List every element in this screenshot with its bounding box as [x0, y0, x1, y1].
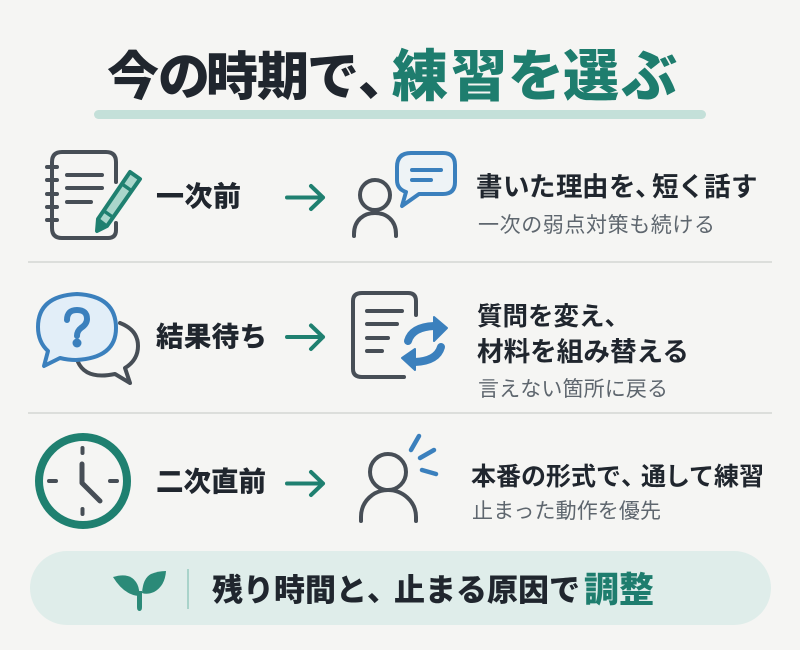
- heading: 質問を変え、材料を組み替える: 材料を組み替える: [477, 337, 689, 367]
- label: 結果待ち: 結果待ち: [156, 321, 267, 352]
- title: [107, 45, 677, 108]
- title: 練習を選ぶ: [392, 45, 677, 108]
- arrow: [287, 186, 323, 209]
- heading: 本番の形式で、通して練習: 本番の形式で、通して練習: [471, 463, 764, 491]
- row 1: 一次前: [47, 152, 758, 238]
- icon: person with emphasis lines: [361, 436, 436, 521]
- note: 言えない箇所に戻る: 言えない箇所に戻る: [478, 378, 668, 401]
- arrow: [287, 326, 323, 349]
- row 2: 結果待ち: [38, 293, 689, 401]
- heading: 質問を変え、材料を組み替える: [477, 303, 689, 367]
- note: 一次の弱点対策も続ける: 一次の弱点対策も続ける: [478, 214, 715, 237]
- title: 今の時期で、: [107, 49, 410, 107]
- arrow: [287, 472, 323, 495]
- icon: sprout: [113, 571, 166, 611]
- banner text: 残り時間と、止まる原因で: [212, 573, 580, 608]
- icon: question speech bubbles: [38, 294, 138, 383]
- title underline: [94, 110, 706, 119]
- label: 二次直前: 二次直前: [156, 466, 266, 497]
- row 3: 二次直前: [39, 436, 764, 525]
- icon: document with refresh: [353, 293, 447, 377]
- bottom banner: [30, 551, 771, 625]
- heading: 書いた理由を、短く話す: 書いた理由を、短く話す: [476, 172, 758, 202]
- heading: 質問を変え、材料を組み替える: 質問を変え、: [477, 303, 630, 331]
- icon: person with speech bubble: [354, 153, 455, 236]
- icon: clock: [39, 437, 127, 525]
- banner text: 調整: [584, 571, 654, 610]
- label: 一次前: 一次前: [156, 181, 241, 212]
- note: 止まった動作を優先: 止まった動作を優先: [472, 500, 661, 523]
- icon: notebook and pencil: [47, 152, 140, 238]
